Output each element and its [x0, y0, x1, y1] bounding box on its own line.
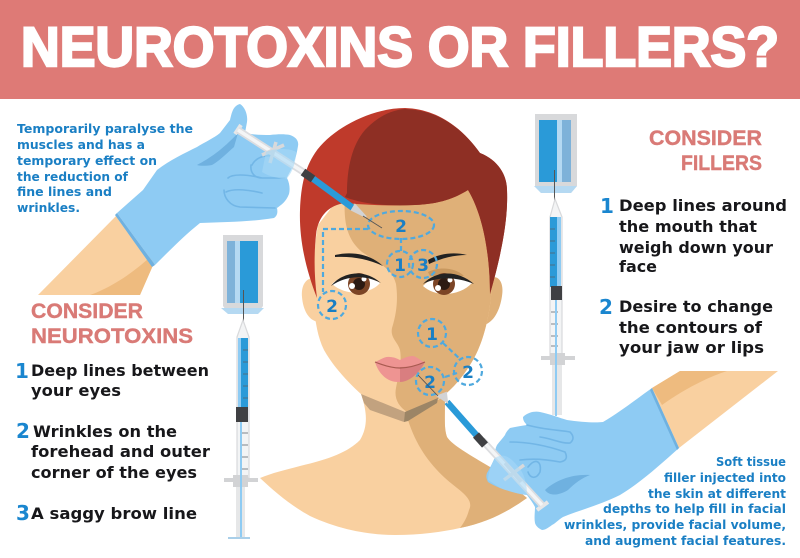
consider fillers heading: CONSIDER [649, 126, 762, 150]
neurotoxins list [15, 359, 210, 525]
lip corner zone [416, 367, 444, 395]
item 2: your jaw or lips [619, 338, 764, 357]
eye corner zone: 2 [326, 297, 338, 317]
right injecting syringe [418, 375, 548, 510]
neck and shoulders [260, 380, 527, 535]
left hand translucent finger [262, 149, 296, 179]
item 2 [16, 419, 210, 482]
needle [242, 290, 244, 322]
item 2: 2 [16, 419, 30, 443]
zone connectors [323, 229, 461, 377]
lower left vertical syringe [221, 235, 264, 539]
item 1: 1 [15, 359, 29, 383]
neurotoxins description: muscles and has a [17, 137, 145, 152]
fillers description: the skin at different [648, 486, 786, 501]
left injecting syringe [235, 125, 382, 228]
item 3: 3 [16, 501, 30, 525]
eye corner zone [318, 291, 346, 319]
vial [534, 114, 577, 193]
fillers description [564, 454, 786, 548]
woman portrait [260, 108, 527, 535]
item 1: Deep lines around [619, 196, 787, 215]
title: NEUROTOXINS OR FILLERS? [21, 15, 779, 78]
face [314, 180, 492, 412]
neurotoxins description [17, 121, 193, 215]
fillers description: wrinkles, provide facial volume, [564, 517, 786, 532]
consider neurotoxins heading: NEUROTOXINS [31, 324, 193, 348]
right hand translucent thumb [488, 456, 527, 495]
eyebrows [335, 253, 467, 266]
chin shadow [361, 394, 438, 422]
fillers description: filler injected into [664, 470, 786, 485]
nasolabial zone [418, 319, 446, 347]
barrel [550, 199, 562, 356]
item 2: the contours of [619, 318, 763, 337]
item 2: corner of the eyes [31, 463, 197, 482]
item 1: the mouth that [619, 217, 757, 236]
neurotoxins description: Temporarily paralyse the [17, 121, 193, 136]
forehead zone [368, 211, 434, 239]
item 2: Wrinkles on the [33, 422, 177, 441]
consider neurotoxins heading: CONSIDER [31, 299, 143, 323]
jaw zone [454, 357, 482, 385]
consider fillers heading: FILLERS [681, 151, 762, 175]
item 1: Deep lines between [31, 361, 209, 380]
jaw zone: 2 [462, 363, 474, 383]
glabella zone 3 [409, 250, 437, 278]
lips [375, 356, 425, 382]
item 2 [599, 295, 773, 357]
neurotoxins description: wrinkles. [17, 200, 80, 215]
left arm [38, 215, 154, 295]
left gloved hand [115, 104, 298, 267]
item 1 [600, 194, 787, 276]
item 1 [15, 359, 209, 400]
forehead and cheek dashed injection zones [318, 211, 482, 395]
lip corner zone: 2 [424, 373, 436, 393]
hair [300, 108, 507, 298]
item 1: 1 [600, 194, 614, 218]
item 1: weigh down your [619, 238, 773, 257]
header banner [0, 0, 800, 99]
item 1: your eyes [31, 381, 121, 400]
consider neurotoxins heading [31, 299, 193, 348]
vial [221, 235, 264, 314]
neck shadow [408, 395, 527, 528]
fillers description: depths to help fill in facial [603, 501, 786, 516]
left eye [331, 273, 381, 295]
glabella zone 1: 1 [394, 256, 406, 276]
neurotoxins description: fine lines and [17, 184, 112, 199]
needle [554, 170, 556, 205]
item 2: Desire to change [619, 297, 773, 316]
fillers description: Soft tissue [716, 454, 786, 469]
item 1: face [619, 257, 657, 276]
item 3: A saggy brow line [31, 504, 197, 523]
fillers description: and augment facial features. [585, 533, 786, 548]
forehead zone: 2 [395, 217, 407, 237]
fillers list [599, 194, 787, 357]
upper right vertical syringe [534, 114, 577, 416]
glabella zone 3: 3 [417, 256, 429, 276]
item 2: 2 [599, 295, 613, 319]
ears [302, 278, 320, 322]
right gloved hand [486, 388, 679, 530]
dark hair [345, 109, 507, 294]
nasolabial zone: 1 [426, 325, 438, 345]
neurotoxins description: the reduction of [17, 169, 129, 184]
item 2: forehead and outer [31, 442, 210, 461]
glabella zone 1 [387, 251, 413, 277]
right eye [423, 269, 474, 295]
consider fillers heading [649, 126, 762, 175]
neurotoxins description: temporary effect on [17, 153, 157, 168]
face shadow side [345, 180, 492, 412]
right arm [652, 371, 778, 448]
barrel [237, 320, 249, 478]
